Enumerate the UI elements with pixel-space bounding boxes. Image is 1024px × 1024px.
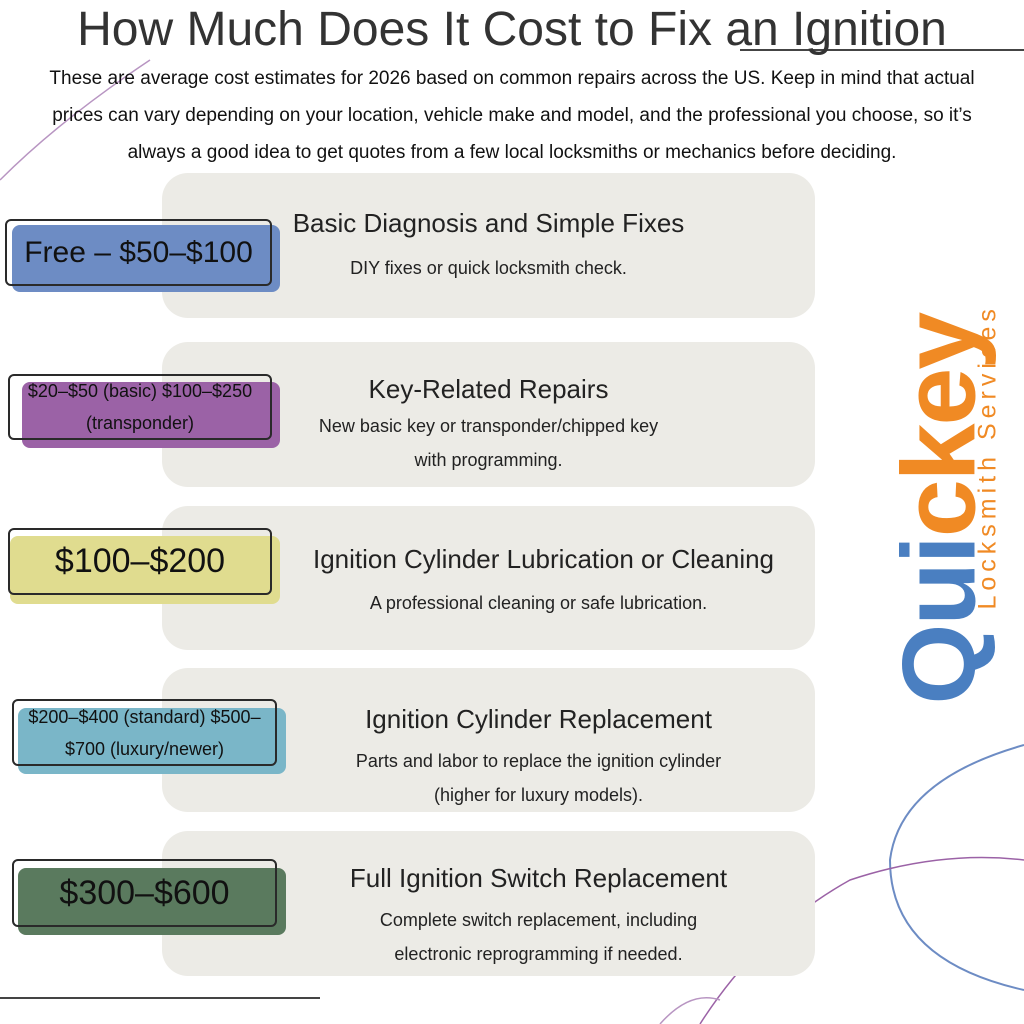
panel: basic diagnosis: DIY fixes or quick locksmith check. [350, 258, 627, 278]
panel: lubrication [162, 506, 815, 650]
panel: full switch: Full Ignition Switch Replacement [350, 863, 727, 893]
subtitle: prices can vary depending on your location, vehicle make and model, and the professional you choose, so it’s [52, 105, 972, 126]
badge: cylinder [12, 699, 286, 774]
panel: key-related [162, 342, 815, 487]
panel: full switch: Complete switch replacement, including [380, 910, 697, 930]
panel: full switch: electronic reprogramming if needed. [394, 944, 683, 964]
badge: switch: $300–$600 [59, 874, 230, 912]
logo: Quickey Locksmith Services: Quickey [882, 314, 998, 704]
title: How Much Does It Cost to Fix an Ignition [77, 3, 947, 56]
badge: key [8, 374, 280, 448]
panel: basic diagnosis: Basic Diagnosis and Simple Fixes [293, 208, 684, 238]
panel: lubrication: A professional cleaning or safe lubrication. [370, 593, 707, 613]
badge: free [5, 219, 280, 292]
badge: cylinder: $200–$400 (standard) $500– [28, 706, 261, 726]
subtitle [49, 68, 975, 163]
badge: lubrication [8, 528, 280, 604]
logo: Quickey Locksmith Services: Locksmith Services [974, 304, 1002, 610]
badge: free: Free – $50–$100 [24, 236, 253, 268]
badge: key: $20–$50 (basic) $100–$250 [28, 381, 252, 401]
badge: key: (transponder) [86, 413, 194, 433]
panel: basic diagnosis [162, 173, 815, 318]
panel: cylinder replacement: Ignition Cylinder Replacement [365, 704, 712, 734]
badge: switch [12, 859, 286, 935]
subtitle: always a good idea to get quotes from a few local locksmiths or mechanics before deciding. [128, 142, 896, 163]
panel: key-related: Key-Related Repairs [369, 374, 608, 404]
panel: lubrication: Ignition Cylinder Lubrication or Cleaning [313, 544, 774, 574]
badge: lubrication: $100–$200 [55, 542, 225, 580]
panel: full switch [162, 831, 815, 976]
panel: cylinder replacement: (higher for luxury models). [434, 785, 643, 805]
panel: key-related: New basic key or transponder/chipped key [319, 416, 658, 436]
panel: cylinder replacement [162, 668, 815, 812]
badge: cylinder: $700 (luxury/newer) [65, 738, 224, 758]
panel: cylinder replacement: Parts and labor to replace the ignition cylinder [356, 751, 721, 771]
panel: key-related: with programming. [414, 450, 563, 470]
subtitle: These are average cost estimates for 2026 based on common repairs across the US. Keep in mind that actual [49, 68, 975, 89]
